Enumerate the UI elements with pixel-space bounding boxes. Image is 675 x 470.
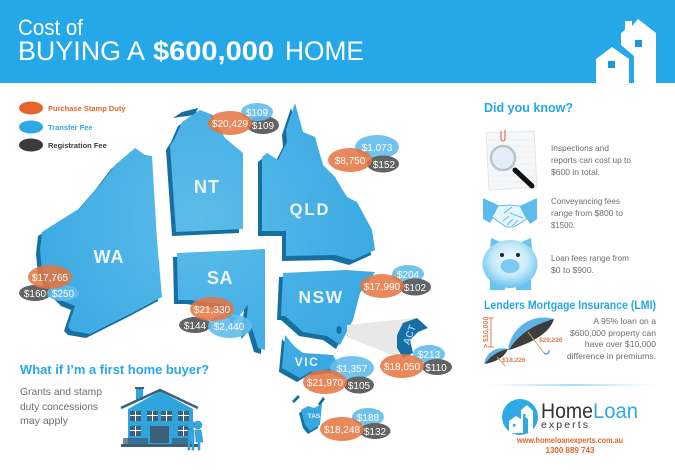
fact: loan fees: Loan fees range from bbox=[551, 253, 629, 263]
contact details: 1300 889 743 bbox=[546, 446, 595, 455]
title bbox=[18, 15, 364, 66]
fees: WA: $160 bbox=[24, 289, 47, 300]
first home buyer text: may apply bbox=[20, 415, 69, 427]
fees: ACT: $110 bbox=[425, 363, 447, 374]
legend bbox=[19, 102, 126, 152]
logo: experts bbox=[541, 419, 588, 431]
fees: NT: $109 bbox=[246, 108, 269, 119]
fees: VIC: $1,357 bbox=[337, 364, 368, 375]
icon: houses bbox=[596, 19, 656, 83]
LMI text: A 95% loan on a bbox=[593, 316, 656, 326]
title: HOME bbox=[285, 36, 364, 66]
icon: handshake bbox=[483, 198, 537, 227]
fees: NSW: $102 bbox=[404, 283, 427, 294]
fees: NSW bbox=[360, 265, 431, 298]
fees: SA bbox=[179, 297, 252, 338]
map: WA bbox=[36, 148, 162, 338]
fact: loan fees: $0 to $900. bbox=[551, 265, 594, 275]
fact: inspections: $600 in total. bbox=[551, 167, 600, 177]
map: NSW bbox=[277, 270, 375, 349]
map: ACT callout: ACT bbox=[401, 324, 419, 347]
fees: SA: $21,330 bbox=[194, 305, 231, 316]
fees: VIC: $105 bbox=[348, 381, 371, 392]
title: BUYING A bbox=[18, 36, 145, 66]
fees: QLD bbox=[328, 135, 399, 172]
legend: Registration Fee bbox=[48, 141, 107, 150]
fact: inspections: reports can cost up to bbox=[551, 155, 631, 165]
LMI text bbox=[567, 316, 656, 361]
LMI text: $600,000 property can bbox=[570, 328, 656, 338]
fees: TAS: $18,248 bbox=[324, 425, 361, 436]
LMI text: have over $10,000 bbox=[585, 339, 656, 349]
fees: NSW: $17,990 bbox=[364, 282, 401, 293]
fees: WA bbox=[19, 265, 79, 301]
legend: Transfer Fee bbox=[48, 123, 93, 132]
map: TAS: TAS bbox=[308, 413, 321, 420]
fees: NT bbox=[208, 103, 279, 135]
map: QLD bbox=[258, 103, 375, 265]
fees: NSW: $204 bbox=[397, 270, 420, 281]
fees: SA: $144 bbox=[184, 321, 207, 332]
icon: umbrellas: $18,226 bbox=[502, 357, 526, 364]
did you know heading: Did you know? bbox=[484, 100, 573, 115]
contact details bbox=[516, 436, 623, 455]
map: VIC bbox=[279, 335, 340, 382]
fact: conveyancing: range from $800 to bbox=[551, 208, 623, 218]
fees: QLD: $8,750 bbox=[335, 156, 366, 167]
fact: conveyancing: $1500. bbox=[551, 220, 575, 230]
fees: ACT: $213 bbox=[418, 350, 441, 361]
first home buyer text: Grants and stamp bbox=[20, 386, 102, 398]
first home buyer text bbox=[20, 386, 102, 427]
logo: Loan bbox=[593, 400, 638, 423]
map: NSW: NSW bbox=[298, 287, 344, 307]
map: TAS bbox=[292, 395, 325, 434]
fact: conveyancing bbox=[551, 196, 623, 230]
fact: inspections bbox=[551, 143, 631, 177]
fees: VIC: $21,970 bbox=[307, 378, 344, 389]
map: SA bbox=[173, 249, 265, 354]
icon: umbrellas bbox=[483, 317, 563, 366]
map: SA: SA bbox=[207, 268, 233, 288]
fees: ACT: $18,050 bbox=[384, 362, 421, 373]
LMI heading: Lenders Mortgage Insurance (LMI) bbox=[484, 300, 656, 312]
icon: house and couple bbox=[121, 387, 203, 450]
icon: umbrellas: > $10,000 bbox=[483, 317, 490, 348]
legend: Purchase Stamp Duty bbox=[48, 104, 126, 113]
LMI text: difference in premiums. bbox=[567, 351, 656, 361]
fees: VIC bbox=[303, 356, 374, 394]
title: $600,000 bbox=[153, 36, 274, 66]
map: NT bbox=[166, 108, 243, 236]
map: QLD: QLD bbox=[290, 201, 330, 219]
fees: QLD: $152 bbox=[373, 160, 396, 171]
fact: loan fees bbox=[551, 253, 629, 275]
fees: TAS: $132 bbox=[364, 427, 387, 438]
fees: ACT bbox=[380, 345, 452, 378]
first home buyer text: duty concessions bbox=[20, 401, 98, 413]
contact details: www.homeloanexperts.com.au bbox=[516, 436, 623, 445]
fees: SA: $2,440 bbox=[214, 322, 245, 333]
map: VIC: VIC bbox=[295, 355, 319, 369]
icon: magnifier on paper bbox=[486, 130, 537, 190]
first home buyer heading: What if I’m a first home buyer? bbox=[20, 362, 209, 377]
icon: piggy bank bbox=[482, 238, 538, 290]
fees: TAS bbox=[320, 408, 390, 441]
fees: NT: $20,429 bbox=[212, 119, 249, 130]
header banner bbox=[0, 0, 675, 83]
map: NT: NT bbox=[194, 177, 220, 197]
fees: QLD: $1,073 bbox=[362, 143, 393, 154]
fact: conveyancing: Conveyancing fees bbox=[551, 196, 620, 206]
title: Cost of bbox=[18, 15, 84, 40]
map: WA: WA bbox=[94, 247, 124, 267]
logo: Home bbox=[541, 400, 593, 423]
fees: TAS: $188 bbox=[357, 413, 380, 424]
map: ACT callout bbox=[347, 318, 428, 358]
fees: NT: $109 bbox=[252, 121, 275, 132]
fees: WA: $17,765 bbox=[32, 273, 69, 284]
logo bbox=[502, 399, 638, 435]
fact: inspections: Inspections and bbox=[551, 143, 609, 153]
icon: umbrellas: $29,226 bbox=[539, 337, 563, 344]
fees: WA: $250 bbox=[52, 289, 75, 300]
